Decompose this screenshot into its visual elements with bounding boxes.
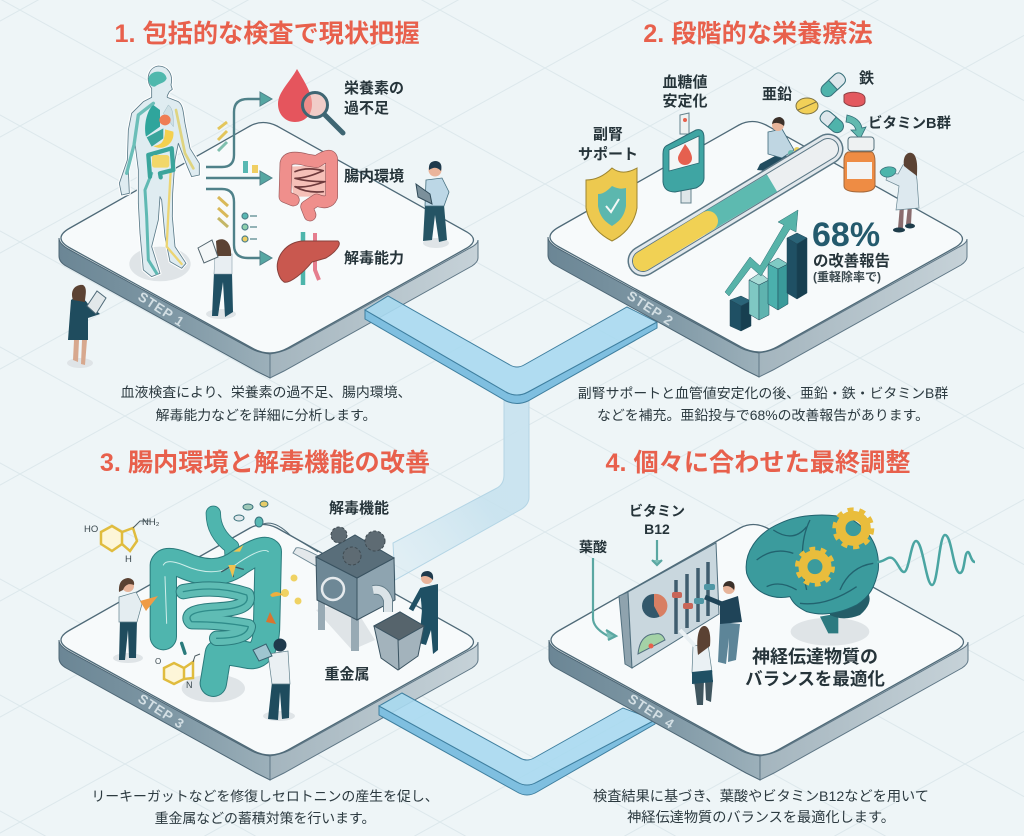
body text 2: などを補充。亜鉛投与で68%の改善報告があります。 bbox=[597, 407, 929, 423]
icon: nerve wave bbox=[877, 535, 975, 585]
person: man with clipboard bbox=[416, 161, 449, 248]
icon: floating capsules and dots bbox=[234, 501, 318, 624]
body text 1: 血液検査により、栄養素の過不足、腸内環境、 bbox=[121, 384, 411, 400]
labels: vitamins bbox=[579, 503, 685, 555]
icon: metal bin bbox=[374, 612, 424, 670]
icon: control panel bbox=[619, 543, 719, 668]
label: adrenal bbox=[578, 126, 638, 163]
title 1: 1. 包括的な検査で現状把握 bbox=[114, 20, 420, 48]
body text 3 bbox=[91, 788, 439, 826]
icon: serotonin molecule lower: N bbox=[186, 680, 192, 690]
labels: minerals bbox=[762, 69, 951, 132]
panel: step 4 platform bbox=[549, 524, 968, 780]
label: detox: 解毒能力 bbox=[344, 249, 404, 267]
icon: serotonin molecule lower: O bbox=[155, 657, 161, 666]
step 2 label: STEP 2 bbox=[624, 288, 676, 329]
title 2: 2. 段階的な栄養療法 bbox=[643, 20, 873, 48]
label: neurotransmitter: 神経伝達物質の bbox=[752, 647, 878, 667]
icon: pills bbox=[796, 71, 866, 139]
icon: intestine large bbox=[163, 513, 268, 702]
person: man with tablet bbox=[253, 638, 295, 721]
title 3: 3. 腸内環境と解毒機能の改善 bbox=[100, 449, 430, 477]
icon: serotonin molecule top: HO bbox=[84, 524, 98, 535]
arrows: vitamin to panel bbox=[593, 540, 662, 640]
panel: step 1 platform bbox=[59, 122, 478, 378]
labels: detox and metal: 解毒機能 bbox=[329, 499, 389, 517]
body text 4: 検査結果に基づき、葉酸やビタミンB12などを用いて bbox=[593, 788, 929, 805]
label: adrenal: 副腎 bbox=[593, 126, 623, 143]
label: nutrient: 過不足 bbox=[344, 100, 389, 117]
label: adrenal: サポート bbox=[578, 146, 638, 163]
step 4 label: STEP 4 bbox=[625, 691, 677, 732]
labels: detox and metal: 重金属 bbox=[324, 665, 370, 683]
stat: 68%: (重軽除率で) bbox=[813, 269, 881, 284]
labels: vitamins: 葉酸 bbox=[579, 539, 607, 555]
body text 3: リーキーガットなどを修復しセロトニンの産生を促し、 bbox=[91, 788, 439, 804]
person: man at panel bbox=[705, 581, 742, 664]
person: doctor bbox=[880, 153, 919, 232]
icon: liver bbox=[277, 232, 339, 285]
panel: step 2 platform bbox=[548, 122, 967, 377]
body text 2 bbox=[578, 385, 948, 423]
icon: serotonin molecule top: H bbox=[125, 554, 132, 565]
label: neurotransmitter bbox=[745, 647, 885, 689]
labels: minerals: 鉄 bbox=[859, 69, 874, 87]
body text 1: 解毒能力などを詳細に分析します。 bbox=[156, 407, 376, 423]
label: nutrient: 栄養素の bbox=[344, 79, 404, 97]
person: woman off-platform bbox=[67, 285, 106, 368]
icon: serotonin molecule lower bbox=[155, 654, 200, 690]
labels: detox and metal bbox=[324, 499, 389, 683]
person: kneeling man bbox=[757, 117, 800, 172]
icon: human body bbox=[119, 66, 199, 281]
icon: glucose meter bbox=[663, 113, 704, 203]
icon: detox machine bbox=[293, 527, 395, 651]
connector: step 1 to step 2 bbox=[365, 296, 657, 404]
labels: vitamins: B12 bbox=[644, 521, 670, 537]
icon: bottle bbox=[844, 137, 875, 192]
step 3 label: STEP 3 bbox=[135, 691, 187, 732]
icon: blood drop and magnifier bbox=[278, 69, 343, 133]
connector: step 3 to step 4 bbox=[379, 693, 655, 795]
stat: 68% bbox=[812, 216, 890, 284]
chart: progress tube bbox=[643, 149, 828, 261]
label: blood sugar bbox=[662, 73, 708, 110]
body text 4 bbox=[593, 788, 929, 826]
label: nutrient bbox=[344, 79, 404, 117]
labels: minerals: ビタミンB群 bbox=[868, 114, 951, 132]
label: blood sugar: 安定化 bbox=[662, 92, 708, 110]
labels: minerals: 亜鉛 bbox=[762, 85, 792, 103]
small yellow indicators bbox=[218, 122, 258, 242]
person: woman at panel bbox=[680, 626, 713, 705]
icon: serotonin molecule top bbox=[84, 517, 160, 565]
body text 3: 重金属などの蓄積対策を行います。 bbox=[155, 810, 375, 826]
body text 4: 神経伝達物質のバランスを最適化します。 bbox=[627, 809, 895, 826]
stat: 68%: の改善報告 bbox=[813, 252, 890, 270]
title 4: 4. 個々に合わせた最終調整 bbox=[605, 449, 911, 477]
person: woman with clipboard bbox=[198, 239, 236, 319]
stat: 68%: 68% bbox=[812, 216, 880, 254]
body text 2: 副腎サポートと血管値安定化の後、亜鉛・鉄・ビタミンB群 bbox=[578, 385, 948, 401]
arrows: body to findings bbox=[206, 92, 272, 265]
person: woman with folder bbox=[113, 578, 158, 663]
icon: shield bbox=[586, 168, 637, 241]
labels: vitamins: ビタミン bbox=[629, 503, 685, 519]
label: blood sugar: 血糖値 bbox=[662, 73, 708, 91]
icon: brain with gears bbox=[746, 510, 878, 646]
chart: bars with arrow bbox=[725, 210, 807, 331]
connector: vertical link down to step 3 machine bbox=[393, 400, 529, 580]
icon: intestine bbox=[285, 156, 332, 215]
body text 1 bbox=[121, 384, 411, 423]
person: man at bin bbox=[411, 571, 438, 654]
panel: step 3 platform bbox=[59, 524, 478, 780]
label: gut: 腸内環境 bbox=[344, 168, 404, 185]
label: neurotransmitter: バランスを最適化 bbox=[745, 669, 885, 689]
step 1 label: STEP 1 bbox=[135, 289, 187, 330]
icon: serotonin molecule top: NH₂ bbox=[142, 517, 160, 528]
